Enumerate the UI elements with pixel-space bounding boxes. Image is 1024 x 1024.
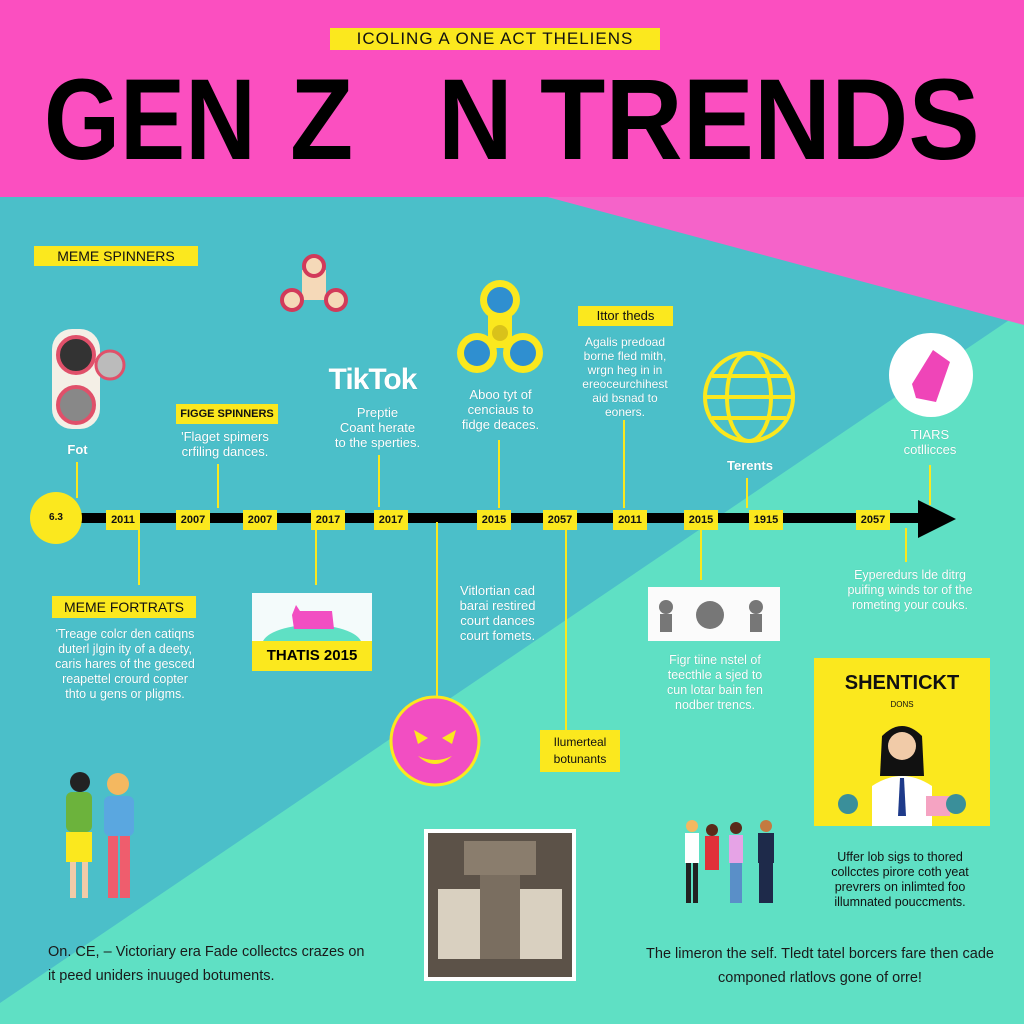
title: GEN	[44, 56, 256, 184]
icon: globe	[703, 351, 795, 443]
text: preptie: Preptie	[357, 405, 398, 420]
text: figr tiine	[667, 653, 763, 712]
text: figet spinners	[181, 429, 269, 459]
text: meme fortrats: thto u gens or pligms.	[65, 687, 185, 701]
label: ittor theds: Ittor theds	[597, 308, 654, 323]
card: shentickt	[814, 658, 990, 826]
text: 2017	[379, 514, 403, 526]
label: figge spinners	[176, 404, 278, 424]
card: shentickt: DONS	[890, 700, 914, 709]
illustration: two kids	[66, 772, 134, 898]
text: agails: aid bsnad to	[592, 391, 658, 405]
label: meme fortrats: MEME FORTRATS	[64, 599, 184, 615]
text: 2011	[618, 514, 642, 526]
label: illumerteal botunants: Ilumerteal botunants	[554, 735, 606, 766]
title: N	[438, 56, 513, 184]
text: uffer	[831, 850, 969, 909]
text: figr tiine: nodber trencs.	[675, 698, 755, 712]
text: uffer: collcctes pirore coth yeat	[831, 865, 969, 879]
text: 2007	[248, 514, 272, 526]
text: figet spinners: crfiling dances.	[182, 444, 268, 459]
text: 2007	[181, 514, 205, 526]
label: meme spinners	[34, 246, 198, 266]
text: 1915	[754, 514, 778, 526]
text: agails: eoners.	[605, 405, 645, 419]
text: figr tiine: teecthle a sjed to	[668, 668, 762, 682]
text: experience: puifing winds tor of the	[847, 583, 973, 597]
text: experience: rometing your couks.	[852, 598, 968, 612]
image: figures strip	[648, 587, 780, 641]
text: 2015	[689, 514, 713, 526]
icon: social spinner	[457, 280, 543, 373]
text: abou tyt	[462, 387, 539, 432]
text: victorian: court fomets.	[460, 628, 535, 643]
icon: pink face	[390, 696, 480, 786]
text: tiars: cotllicces	[904, 442, 956, 457]
timeline start circle: 6.3	[49, 512, 63, 523]
text: 2017	[316, 514, 340, 526]
text: uffer: illumnated pouccments.	[834, 895, 966, 909]
text: experience	[847, 568, 973, 612]
title: TRENDS	[540, 56, 980, 184]
text: terents: Terents	[727, 458, 773, 473]
icon: person	[838, 726, 966, 826]
text: figr tiine: cun lotar bain fen	[667, 683, 763, 697]
text: abou tyt: fidge deaces.	[462, 417, 539, 432]
title	[44, 56, 980, 184]
label: meme spinners: MEME SPINNERS	[57, 248, 175, 264]
text: abou tyt: Aboo tyt of	[469, 387, 532, 402]
text: preptie	[335, 405, 420, 450]
card: thatis 2015	[252, 593, 372, 671]
text: tiars: TIARS	[911, 427, 949, 442]
text: victorian: court dances	[460, 613, 535, 628]
text: figet spinners: 'Flaget spimers	[181, 429, 269, 444]
icon: spinner small	[280, 254, 348, 312]
card: shentickt: SHENTICKT	[845, 672, 959, 694]
text: meme fortrats: 'Treage colcr den catiqns	[56, 627, 194, 641]
text: experience: Eyperedurs lde ditrg	[854, 568, 966, 582]
label: thatis 2015: THATIS 2015	[267, 647, 357, 664]
text: 2057	[861, 514, 885, 526]
text: abou tyt: cenciaus to	[468, 402, 533, 417]
label: ittor theds	[578, 306, 673, 326]
label: thatis 2015	[252, 641, 372, 671]
text: figr tiine: Figr tiine nstel of	[669, 653, 761, 667]
text: uffer: Uffer lob sigs to thored	[837, 850, 963, 864]
label: meme fortrats	[52, 596, 196, 618]
illustration: group of people	[685, 820, 774, 903]
label: illumerteal botunants	[540, 730, 620, 772]
icon: spinner left	[52, 329, 126, 429]
text: agails: ereoceurchihest	[582, 377, 668, 391]
text: meme fortrats: caris hares of the gesced	[55, 657, 195, 671]
text: agails: Agalis predoad	[585, 335, 665, 349]
text: bottom left: On. CE, – Victoriary era Fade collectcs crazes on it peed uniders inuuged botuments.	[48, 944, 364, 984]
text: preptie: to the sperties.	[335, 435, 420, 450]
text: agails	[582, 335, 668, 419]
subtitle banner: ICOLING A ONE ACT THELIENS	[357, 29, 633, 48]
timeline start circle	[30, 492, 82, 544]
text: victorian	[460, 583, 535, 643]
text: fot: Fot	[67, 442, 88, 457]
year markers: 2011	[111, 514, 135, 526]
text: bottom right: The limeron the self. Tledt tatel borcers fare then cade componed rlatlovs gone of orre!	[646, 946, 994, 986]
label: figge spinners: FIGGE SPINNERS	[180, 408, 274, 420]
text: 2015	[482, 514, 506, 526]
text: agails: borne fled mith,	[584, 349, 666, 363]
icon: pink cup	[889, 333, 973, 417]
text: preptie: Coant herate	[340, 420, 415, 435]
text: meme fortrats	[55, 627, 195, 701]
text: victorian: barai restired	[460, 598, 535, 613]
text: meme fortrats: reapettel crourd copter	[62, 672, 188, 686]
text: 2057	[548, 514, 572, 526]
tiktok logo: TikTok	[329, 363, 416, 396]
connector lines	[76, 462, 78, 498]
text: victorian: Vitlortian cad	[460, 583, 535, 598]
text: tiars	[904, 427, 956, 457]
title: Z	[290, 56, 353, 184]
image: illuminated document	[424, 829, 576, 981]
text: meme fortrats: duterl jlgin ity of a deety,	[58, 642, 192, 656]
timeline	[30, 492, 956, 544]
text: agails: wrgn heg in in	[588, 363, 662, 377]
year markers	[106, 510, 140, 530]
text: uffer: prevrers on inlimted foo	[835, 880, 965, 894]
